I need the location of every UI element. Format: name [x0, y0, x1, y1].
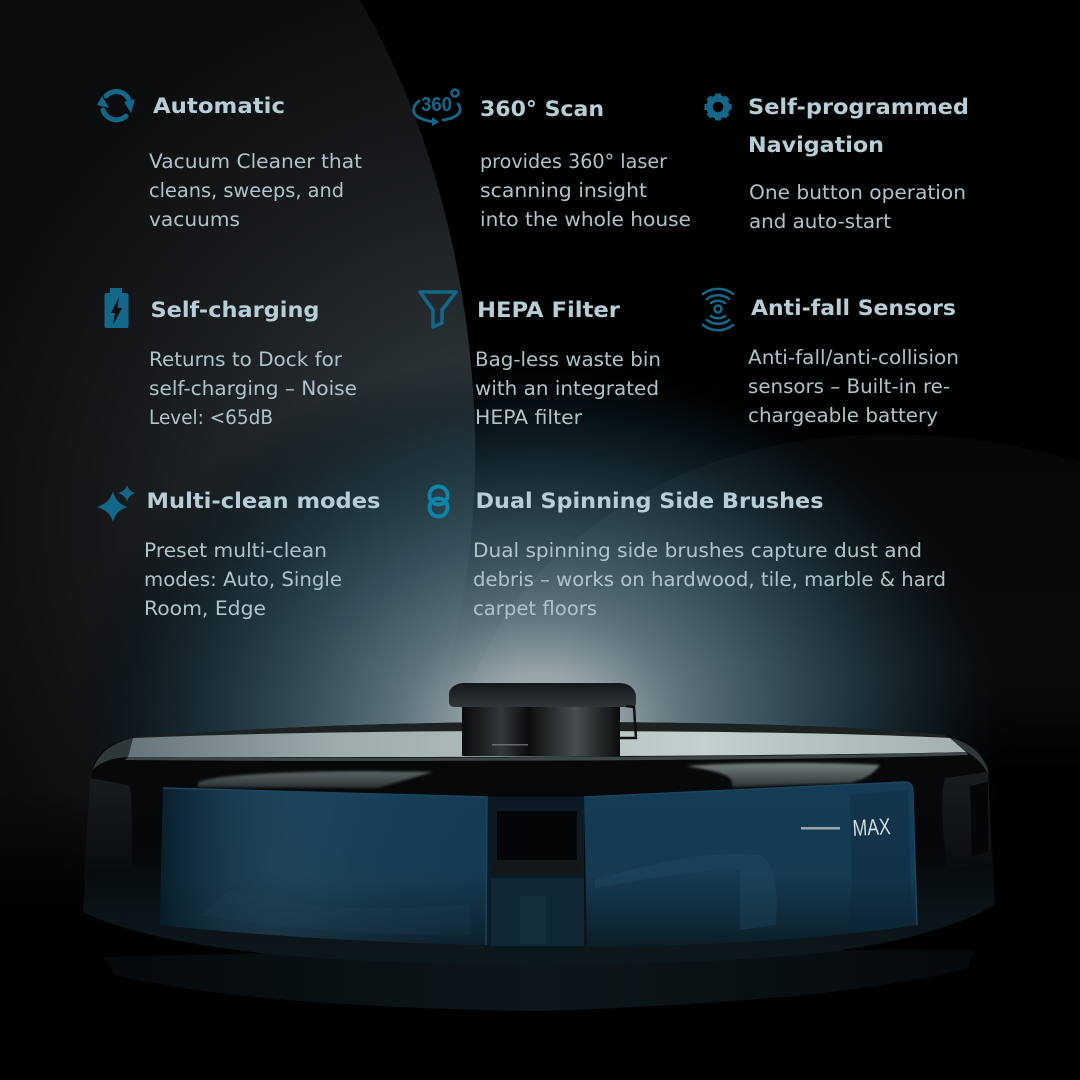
description: Vacuum Cleaner that — [149, 150, 362, 173]
description: with an integrated — [475, 377, 659, 400]
description: HEPA filter — [475, 406, 583, 429]
feature: multi-clean modes — [97, 485, 380, 620]
description: Bag-less waste bin — [475, 348, 661, 371]
description: chargeable battery — [748, 404, 938, 427]
icon: battery — [104, 288, 128, 328]
description: debris – works on hardwood, tile, marble & hard — [473, 568, 946, 591]
description: Room, Edge — [144, 597, 266, 620]
feature: automatic — [97, 92, 362, 231]
feature: hepa filter — [420, 292, 661, 429]
icon: sparkles — [97, 485, 135, 522]
description: Preset multi-clean — [144, 539, 327, 562]
description: cleans, sweeps, and — [149, 179, 344, 202]
feature: self-programmed navigation — [704, 94, 969, 233]
side panel right — [942, 772, 992, 870]
rim edge highlight — [93, 738, 989, 775]
right bin window — [584, 782, 917, 947]
icon: gear — [704, 94, 732, 120]
feature: self-charging — [104, 288, 357, 429]
reflection left — [198, 771, 433, 788]
description — [749, 181, 966, 233]
center slot — [487, 797, 584, 947]
top rim — [133, 722, 950, 738]
feature: 360 scan — [414, 90, 691, 231]
icon: brushes — [430, 486, 448, 516]
icon: 360 scan — [414, 90, 460, 126]
rim lower line — [125, 752, 968, 761]
icon: refresh arrows — [97, 92, 135, 120]
heading — [748, 95, 969, 158]
description: sensors – Built-in re- — [748, 375, 950, 398]
heading: 360° Scan — [480, 97, 604, 122]
vacuum body — [83, 722, 995, 965]
description: Level: <65dB — [149, 406, 273, 429]
feature: dual spinning side brushes — [430, 486, 946, 620]
side panel left — [84, 778, 132, 880]
description: Dual spinning side brushes capture dust and — [473, 539, 922, 562]
max line — [801, 827, 840, 830]
heading: HEPA Filter — [477, 298, 620, 323]
max label: MAX — [852, 813, 891, 841]
base shadow — [103, 950, 975, 1011]
description — [149, 150, 362, 231]
robot vacuum — [83, 683, 995, 1011]
heading: Anti-fall Sensors — [751, 296, 956, 321]
description: scanning insight — [480, 179, 647, 202]
description: carpet floors — [473, 597, 597, 620]
heading: Navigation — [748, 133, 884, 158]
lidar tower — [449, 683, 636, 756]
description — [144, 539, 342, 620]
description: and auto-start — [749, 210, 891, 233]
heading: Automatic — [153, 94, 285, 119]
left bin window — [160, 788, 487, 945]
heading: Dual Spinning Side Brushes — [476, 489, 824, 514]
reflection right — [687, 763, 880, 787]
icon: sensor waves — [703, 289, 733, 330]
heading: Self-programmed — [748, 95, 969, 120]
top surface — [128, 731, 966, 757]
description — [473, 539, 946, 620]
heading: Self-charging — [150, 298, 320, 323]
description: Anti-fall/anti-collision — [748, 346, 959, 369]
feature: anti-fall sensors — [703, 289, 959, 427]
description: modes: Auto, Single — [144, 568, 342, 591]
description: provides 360° laser — [480, 150, 668, 173]
description: vacuums — [149, 208, 240, 231]
icon: funnel — [420, 292, 456, 327]
description — [748, 346, 959, 427]
description: into the whole house — [480, 208, 691, 231]
description — [475, 348, 661, 429]
description — [480, 150, 691, 231]
heading: Multi-clean modes — [146, 489, 380, 514]
description: Returns to Dock for — [149, 348, 343, 371]
description: One button operation — [749, 181, 966, 204]
description: self-charging – Noise — [149, 377, 357, 400]
icon: 360 scan: 360 — [421, 94, 452, 116]
description — [149, 348, 357, 429]
